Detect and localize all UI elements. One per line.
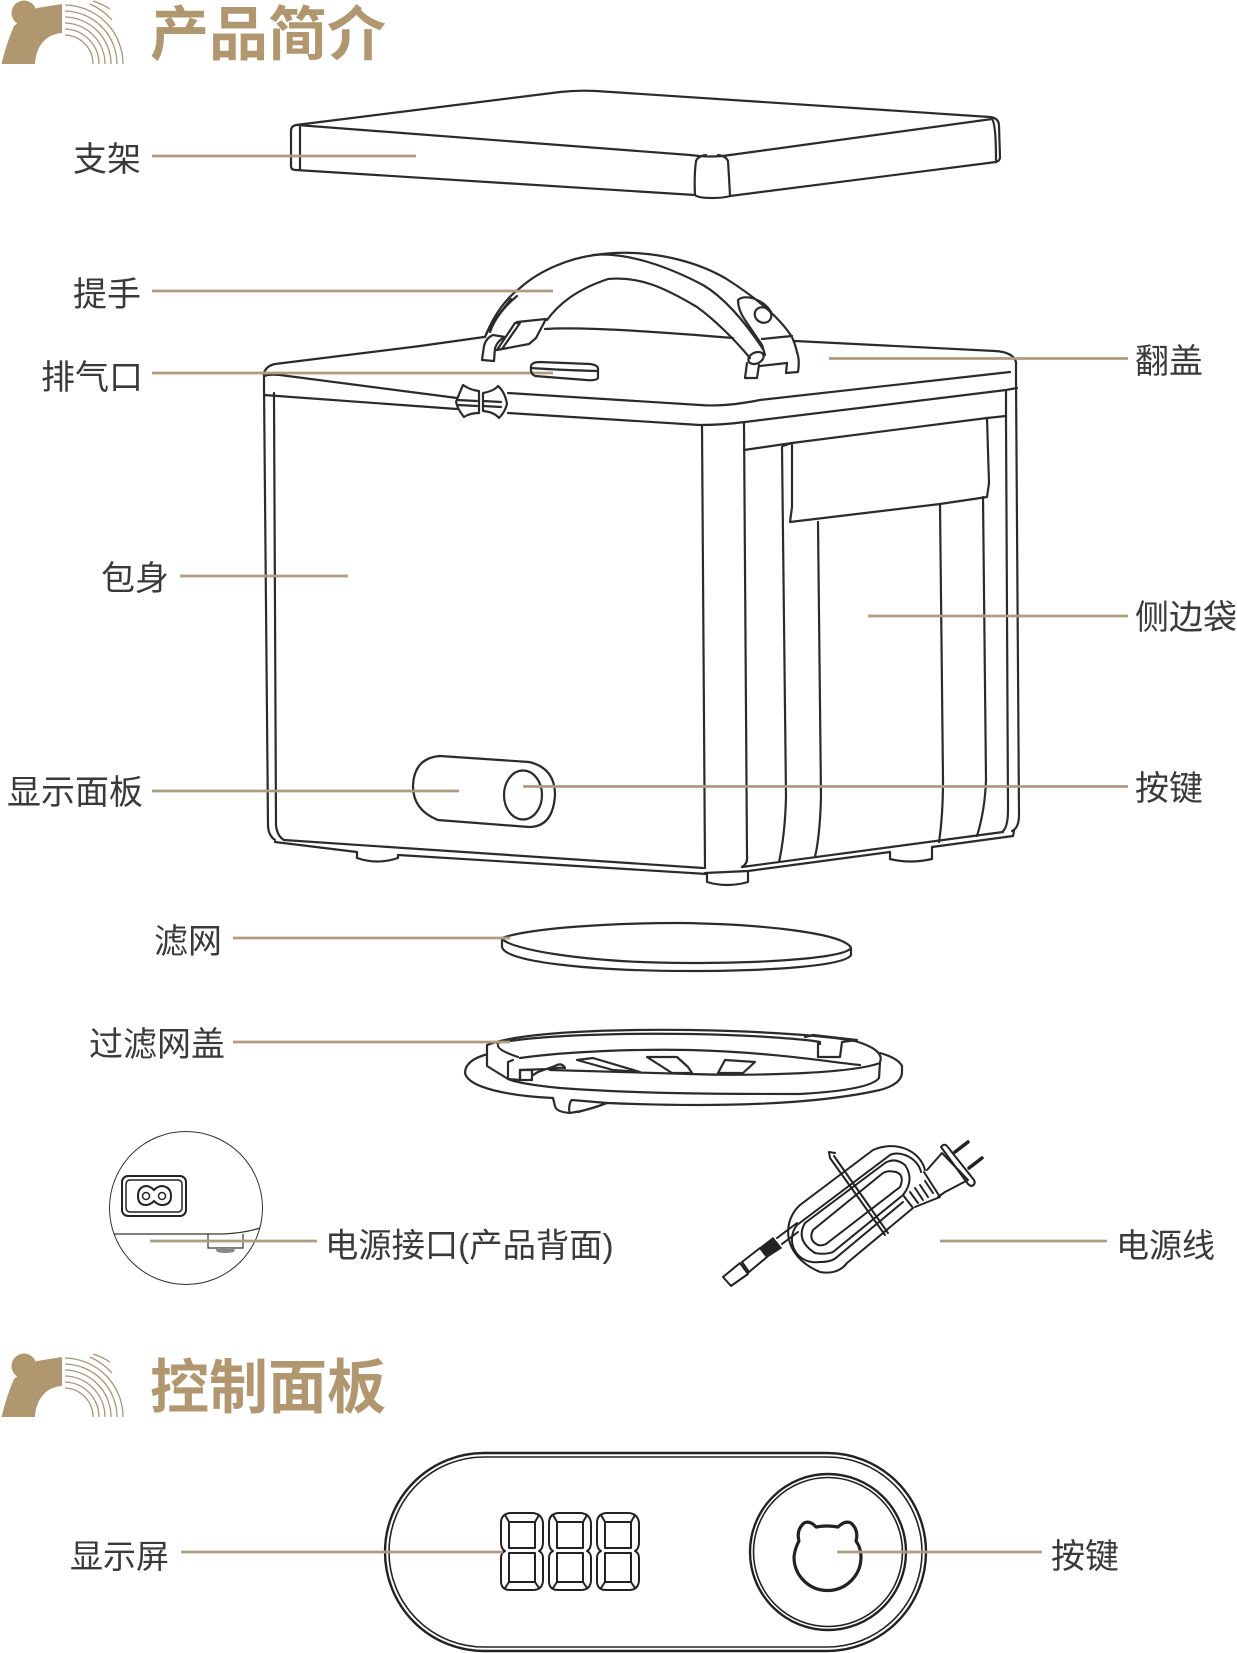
label: 滤网: 滤网: [154, 923, 222, 961]
heading: control panel: 控制面板: [150, 1355, 386, 1421]
handle: [482, 253, 799, 378]
socket detail circle: [110, 1132, 262, 1284]
label: 按键: 按键: [1135, 770, 1203, 808]
bag body: [264, 380, 1019, 885]
heading: product intro: 产品简介: [150, 2, 386, 68]
control panel round button with bear: [750, 1474, 906, 1630]
label: 排气口: 排气口: [41, 359, 143, 397]
label: 过滤网盖: 过滤网盖: [89, 1026, 225, 1064]
filter cover: [465, 1030, 902, 1113]
zipper: [456, 385, 507, 418]
lid: [264, 328, 1017, 425]
label: 翻盖: 翻盖: [1135, 343, 1203, 381]
label: 侧边袋: 侧边袋: [1135, 599, 1237, 637]
label: 电源线: 电源线: [1116, 1227, 1215, 1264]
icon: bear logo, product intro: [2, 0, 123, 64]
label: 支架: 支架: [73, 141, 141, 179]
icon: bear logo, control panel: [2, 1354, 123, 1417]
label: 电源接口(产品背面): 电源接口(产品背面): [325, 1228, 614, 1265]
label: 提手: 提手: [73, 276, 141, 314]
label: 按键 control panel: 按键: [1051, 1538, 1119, 1576]
power cord: [723, 1142, 982, 1286]
vent: [531, 362, 598, 380]
seven segment display: [501, 1513, 639, 1590]
control panel outline: [385, 1453, 926, 1651]
top cover plate: [291, 91, 1000, 198]
label: 包身: 包身: [101, 560, 169, 598]
label: 显示屏: 显示屏: [70, 1538, 169, 1575]
filter disc: [502, 923, 851, 971]
display panel on body: [413, 756, 555, 827]
side pocket flap: [790, 418, 989, 522]
label: 显示面板: 显示面板: [7, 774, 143, 812]
